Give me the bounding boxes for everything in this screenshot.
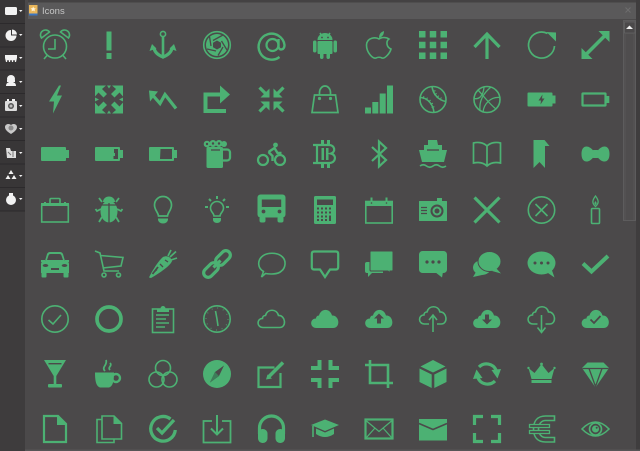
icon: clipboard: [152, 306, 174, 332]
icon: compass: [203, 360, 231, 388]
icon: circle check: [42, 306, 68, 332]
icon: shopping cart: [95, 251, 123, 277]
icon: crown: [527, 363, 556, 383]
icon: cloud filled: [311, 310, 338, 328]
icon: refresh: [529, 32, 556, 58]
icon: open book: [474, 142, 500, 166]
icon: compress arrows: [260, 88, 284, 112]
icon: share arrow: [206, 86, 230, 111]
icon: sync: [473, 364, 501, 384]
icon: candle: [592, 196, 600, 224]
icon: document: [44, 415, 67, 442]
icon: at sign: [259, 34, 284, 60]
sidebar icon: triangle stack: [6, 170, 22, 179]
icon: envelope filled: [419, 419, 447, 440]
icon: camera: [419, 198, 447, 221]
icon: crop: [365, 360, 393, 388]
icon: coffee cup: [95, 360, 120, 388]
icon: car: [41, 252, 69, 278]
icon: battery two thirds: [95, 147, 123, 161]
icon: bright bulb: [205, 196, 229, 223]
icon: light bulb: [154, 196, 172, 224]
sidebar icon: flask: [6, 193, 22, 205]
icon: chain link: [202, 249, 232, 279]
sidebar icon: animals: [5, 55, 22, 62]
window title: Icons: [42, 6, 65, 17]
icon: exit fullscreen corners: [311, 360, 339, 388]
icon: speech bubble outline: [259, 253, 285, 277]
icon: download to box: [204, 415, 230, 442]
close button: [626, 8, 630, 12]
icon: signal bars: [365, 86, 393, 114]
icon: beer mug: [204, 140, 230, 168]
icon: wall clock: [204, 306, 230, 332]
icon: bookmark: [534, 140, 550, 168]
sidebar icon: map blocks: [6, 148, 22, 158]
window icon: [29, 5, 38, 16]
icon: diamond: [582, 362, 609, 388]
icon: fullscreen corners: [474, 416, 500, 442]
icon: filled double bubbles: [365, 251, 393, 277]
icon: envelope outline: [366, 420, 392, 438]
icon: aperture: [204, 32, 230, 58]
icon: expand: [95, 86, 123, 114]
icon: anchor: [150, 31, 176, 59]
icon: round double bubbles: [473, 252, 501, 277]
icon: check mark: [583, 256, 608, 272]
sidebar toolbar: [0, 0, 25, 451]
icon: bow tie: [582, 146, 610, 162]
icon: cloud outline: [258, 310, 284, 328]
icon: cloud download filled: [473, 310, 500, 328]
icon: bluetooth: [372, 142, 386, 166]
icon: battery one third: [149, 147, 177, 161]
icon: cloud check filled: [582, 310, 609, 328]
icon: apple: [366, 31, 391, 58]
icon: cloud upload outline: [420, 307, 446, 332]
icon: grid: [419, 31, 447, 59]
sidebar icon: chart pie: [6, 30, 22, 41]
icon: close: [474, 198, 500, 222]
icon: battery charging: [528, 92, 556, 106]
icon: shopping bag: [312, 86, 338, 112]
icon: ship: [419, 140, 447, 167]
icon: bus: [258, 194, 286, 222]
icon: diagonal resize: [582, 31, 610, 59]
icon: euro: [530, 416, 554, 442]
icon: battery empty: [582, 94, 609, 106]
icon: lightning: [49, 86, 62, 114]
icon: ring: [97, 307, 121, 331]
icon: battery full: [41, 147, 69, 161]
sidebar icon: shapes: [5, 7, 22, 15]
sidebar icon: person: [6, 75, 22, 86]
icon: square speech bubble: [312, 252, 338, 277]
icon: bicycle: [258, 143, 285, 165]
scrollbar: [624, 20, 636, 220]
icon: graduation cap: [311, 420, 339, 437]
icon: alarm clock: [40, 30, 70, 59]
icon: android: [313, 33, 337, 59]
icon: three circles: [149, 360, 177, 387]
icon: edit: [258, 362, 283, 387]
icon: exclamation: [106, 32, 112, 59]
icon: documents: [97, 416, 122, 442]
icon: headphones: [258, 416, 285, 443]
icon: zigzag arrow: [149, 90, 176, 108]
icon: carrot: [149, 250, 177, 278]
icon: briefcase: [41, 198, 69, 222]
title bar: [28, 0, 636, 19]
icon: bug: [96, 196, 122, 223]
icon: baseball: [420, 86, 446, 112]
icon: bitcoin: [313, 140, 335, 168]
icon: calendar: [365, 198, 393, 223]
icon: close circle: [528, 197, 555, 223]
icon: arrow up: [474, 34, 500, 59]
sidebar icon: camera: [5, 99, 22, 111]
icon: check circle: [151, 416, 175, 441]
sidebar icon: heart: [5, 124, 22, 134]
icon: calculator: [314, 196, 336, 224]
icon: eye: [582, 422, 609, 436]
icon: square bubble with dots: [419, 251, 447, 278]
icon: cube: [420, 360, 446, 388]
icon: cloud download outline: [528, 307, 554, 332]
icon: basketball: [474, 86, 500, 112]
icon: round bubble with dots: [528, 252, 556, 278]
icon: cloud upload filled: [365, 310, 392, 328]
icon: martini glass: [44, 360, 66, 388]
